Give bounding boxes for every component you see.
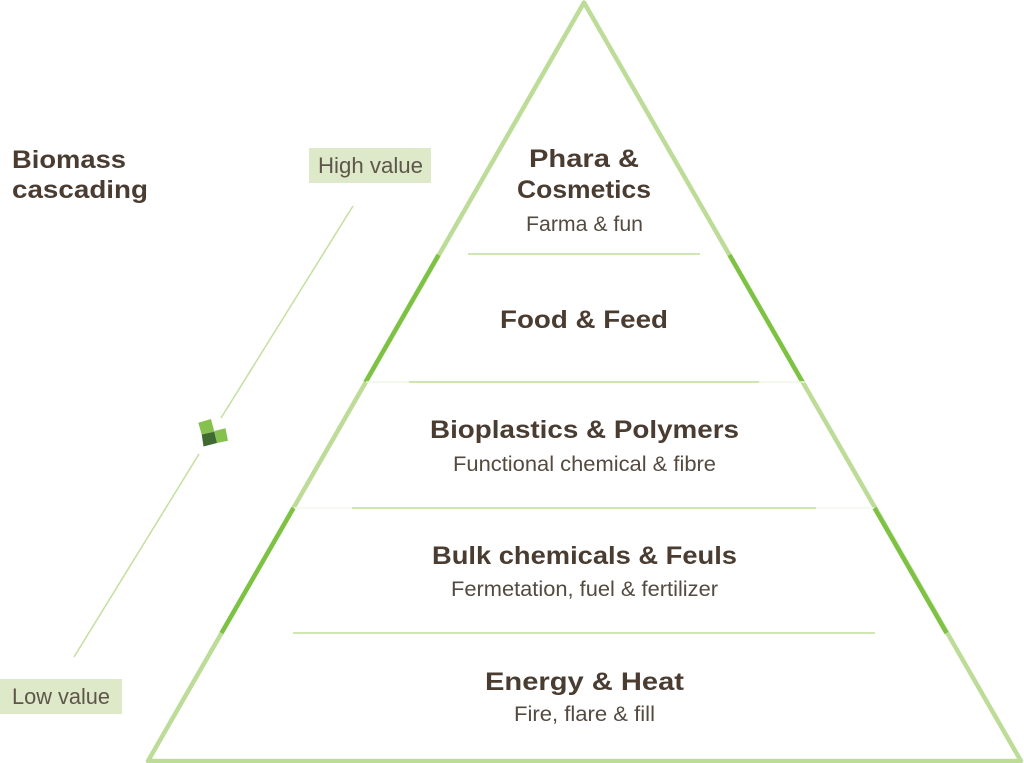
tier: Food and feed: Food & Feed: [500, 306, 668, 334]
tier: Pharma and cosmetics: [517, 145, 651, 236]
title: cascading: [12, 176, 148, 204]
tier: Energy and heat: Energy & Heat: [485, 668, 685, 696]
low value label: [0, 679, 122, 714]
title: Biomass: [12, 146, 126, 174]
high value label: [309, 148, 431, 183]
tier: Bioplastics and polymers: Functional chemical & fibre: [453, 453, 716, 476]
tier: Bulk chemicals and fuels: [432, 542, 737, 601]
tier: Bioplastics and polymers: [430, 416, 739, 476]
tier: Bulk chemicals and fuels: Bulk chemicals & Feuls: [432, 542, 737, 570]
tier: Pharma and cosmetics: Phara &: [529, 145, 639, 173]
value axis line: [74, 206, 353, 657]
title: [12, 146, 148, 204]
low value label: Low value: [12, 684, 110, 709]
tier: Pharma and cosmetics: Cosmetics: [517, 176, 651, 204]
tier: Pharma and cosmetics: Farma & fun: [526, 213, 643, 236]
high value label: High value: [318, 153, 423, 178]
tier: Bioplastics and polymers: Bioplastics & Polymers: [430, 416, 739, 444]
icon: cascading squares: [198, 419, 228, 446]
pyramid tier dividers: [293, 254, 875, 633]
tier: Energy and heat: [485, 668, 685, 726]
tier: Bulk chemicals and fuels: Fermetation, fuel & fertilizer: [451, 578, 718, 601]
tier: Energy and heat: Fire, flare & fill: [514, 703, 655, 726]
